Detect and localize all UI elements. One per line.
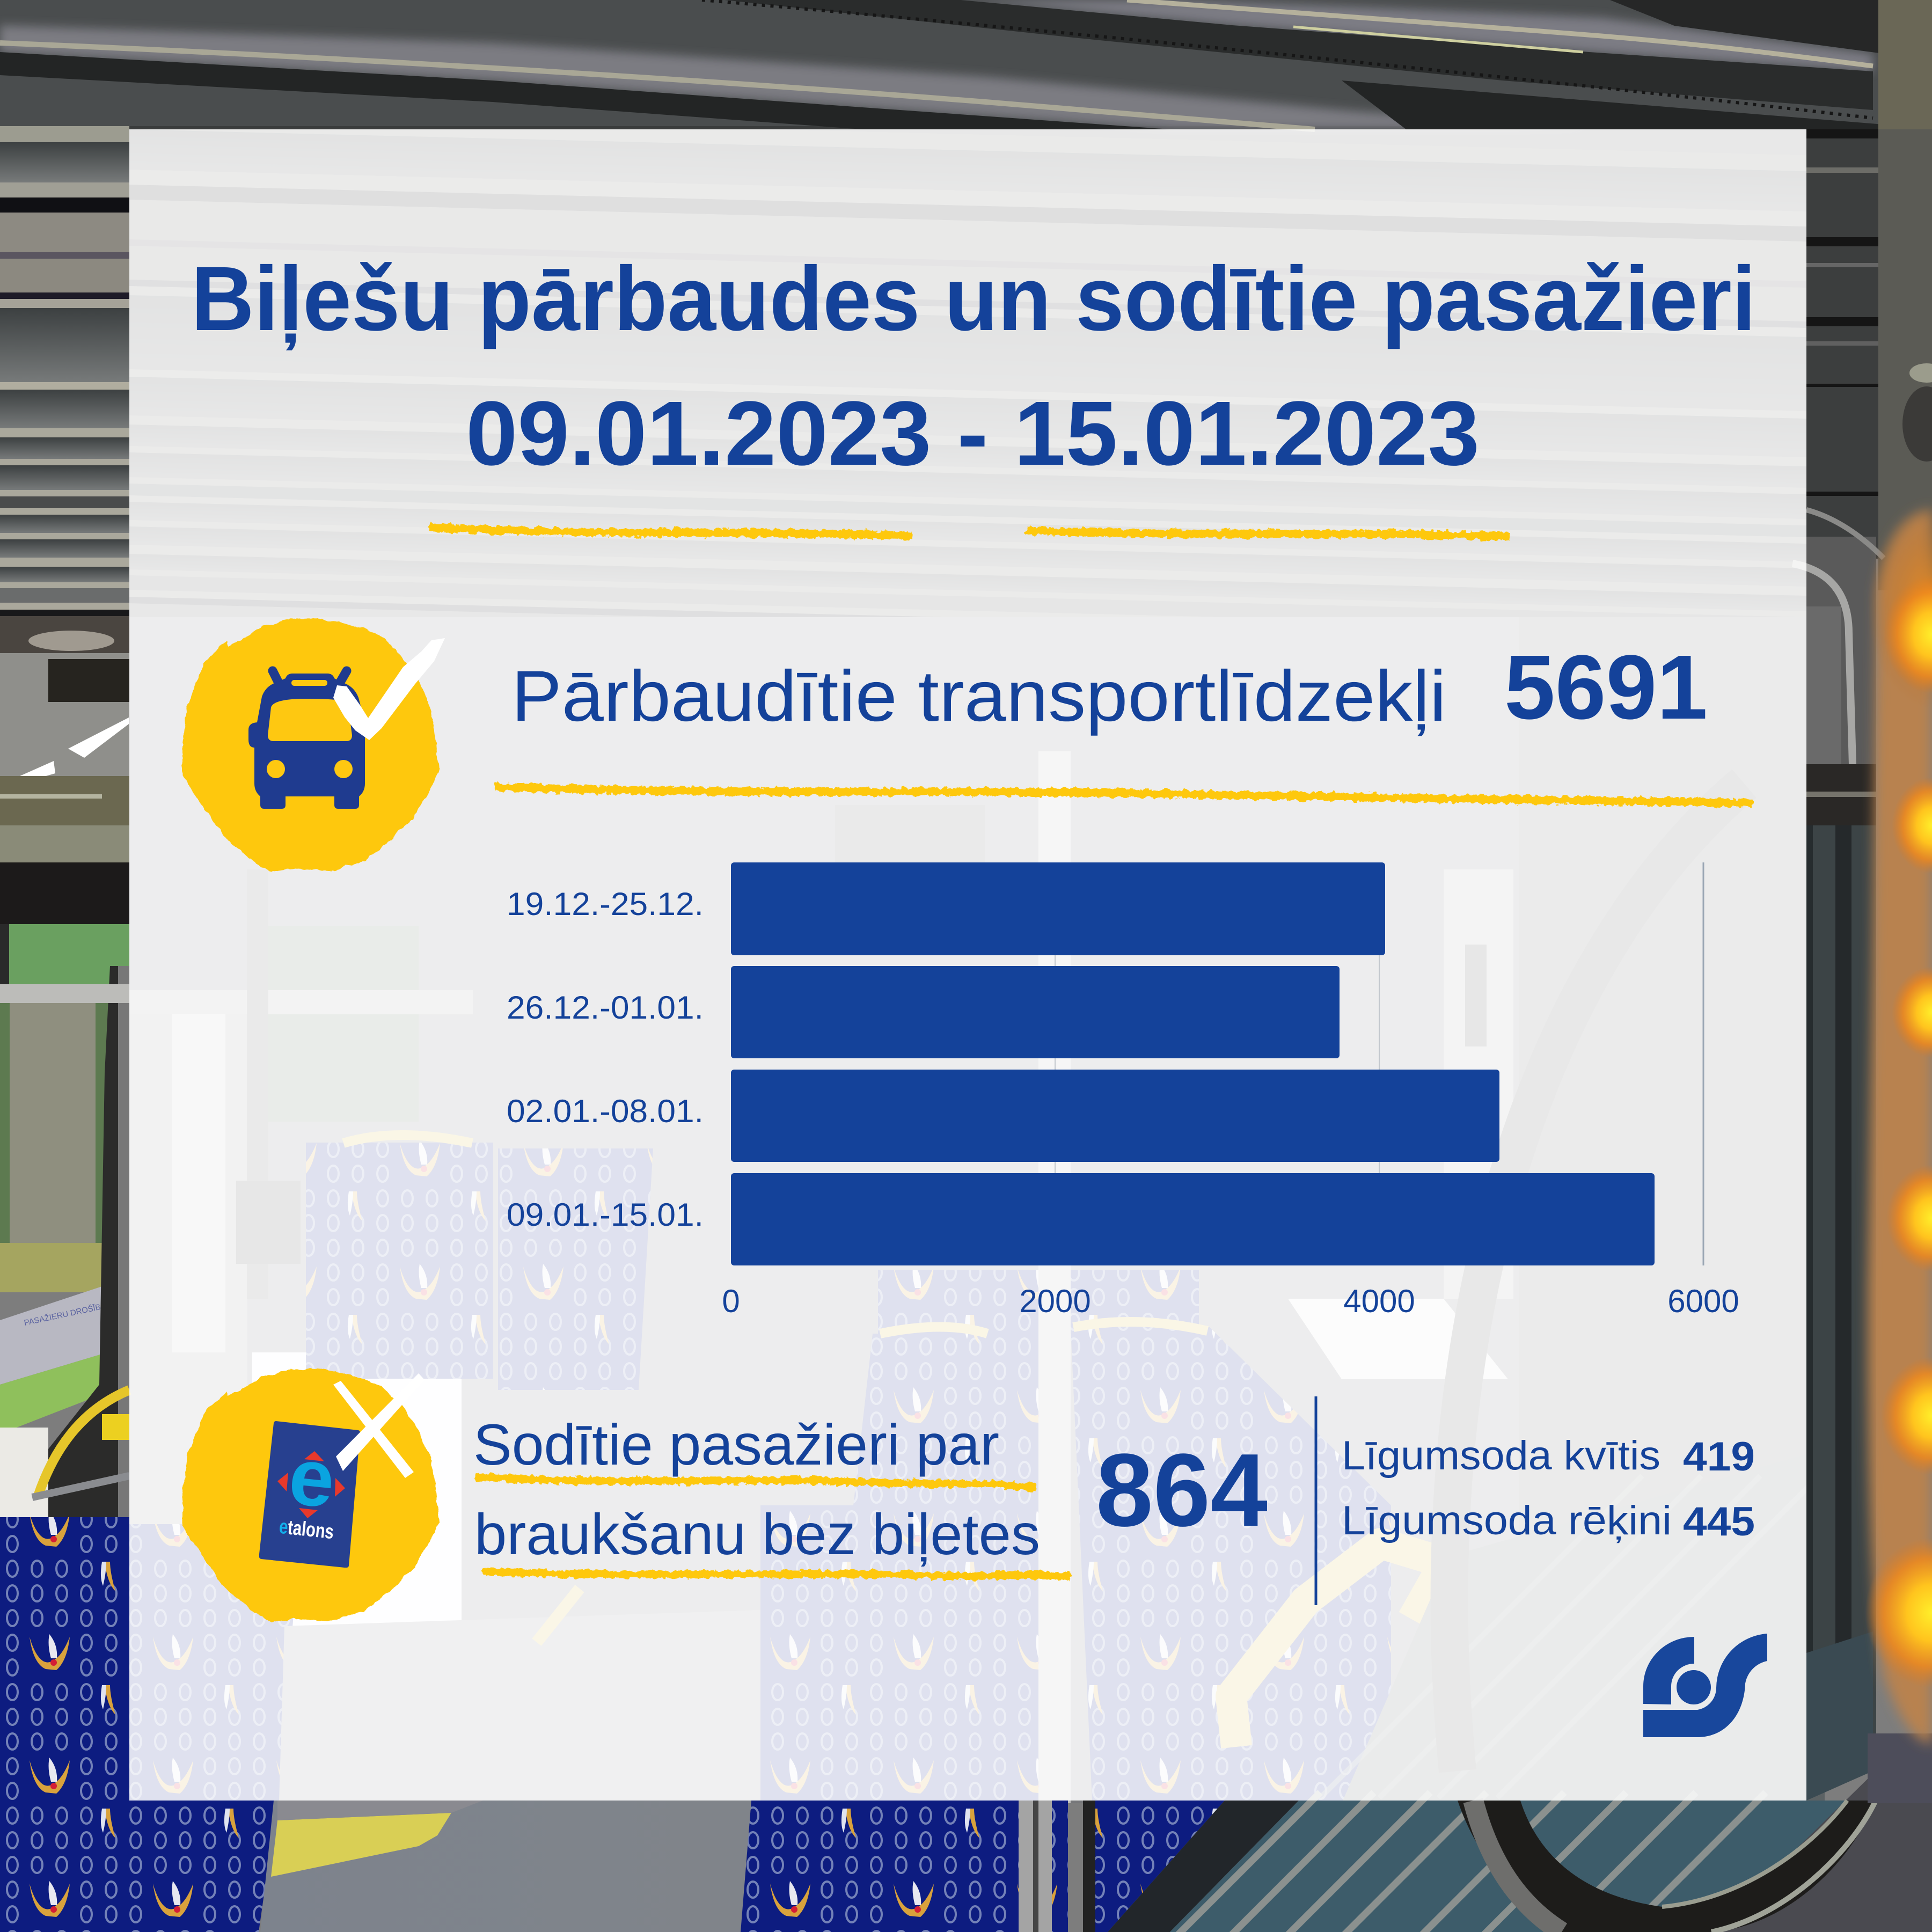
breakdown of fines [1342,1433,1755,1545]
number: fined passengers: 864 [1096,1432,1268,1548]
bar chart: inspected vehicles by week: 19.12.-25.12. [507,886,704,922]
breakdown of fines: 445 [1683,1499,1755,1545]
number: inspected vehicles: 5691 [1504,636,1708,738]
bar chart: inspected vehicles by week: 0 [722,1283,740,1319]
heading: fined passengers: braukšanu bez biļetes [474,1502,1040,1567]
heading: inspected vehicles: Pārbaudītie transportlīdzekļi [511,656,1446,736]
bottom floor with yellow marking [260,1801,755,1932]
bar chart: inspected vehicles by week: 6000 [1667,1283,1739,1319]
icon: e-talons card with cross: e [285,1430,339,1525]
bar chart: inspected vehicles by week [507,862,1739,1319]
curved ceiling band at the top [0,0,1932,129]
heading: fined passengers: Sodītie pasažieri par [473,1412,999,1477]
bar chart: inspected vehicles by week: 09.01.-15.01. [507,1197,704,1233]
breakdown of fines: Līgumsoda kvītis [1342,1433,1660,1479]
bar chart: inspected vehicles by week: 4000 [1343,1283,1415,1319]
left side: door interior and window [0,616,277,1932]
bar chart: inspected vehicles by week: 02.01.-08.01. [507,1093,704,1129]
title: Biļešu pārbaudes un sodītie pasažieri [191,248,1756,350]
title brush underlines [429,527,1510,537]
bar chart: inspected vehicles by week: 26.12.-01.01. [507,990,704,1026]
heading brush underline [495,787,1752,803]
breakdown of fines: Līgumsoda rēķini [1342,1498,1672,1543]
lower right floor slats and handle [1108,1771,1932,1932]
vertical divider [1315,1396,1317,1605]
ceiling slats beside and behind panel [0,126,1806,617]
orange indicator lights [1865,504,1932,1744]
heading: fined passengers [473,1412,1040,1567]
icon: e-talons card with cross: etalons [278,1516,335,1543]
title [191,248,1756,485]
breakdown of fines: 419 [1683,1434,1755,1480]
bottom seats and pole [741,1801,1225,1932]
fined passengers brush underlines [475,1477,1070,1577]
logo: Rīgas Satiksme [1643,1634,1767,1737]
right side: dark door frame [1792,129,1932,1803]
title: 09.01.2023 - 15.01.2023 [466,383,1480,485]
icon: bus with check mark [182,618,445,872]
left side: door interior and window: PASAŽIERU DROŠĪBAI [23,1301,109,1328]
panel: translucent white card [129,129,1806,1801]
icon: e-talons card with cross [182,1368,439,1622]
panel-area interior scene [129,617,1825,1803]
bar chart: inspected vehicles by week: 2000 [1019,1283,1091,1319]
